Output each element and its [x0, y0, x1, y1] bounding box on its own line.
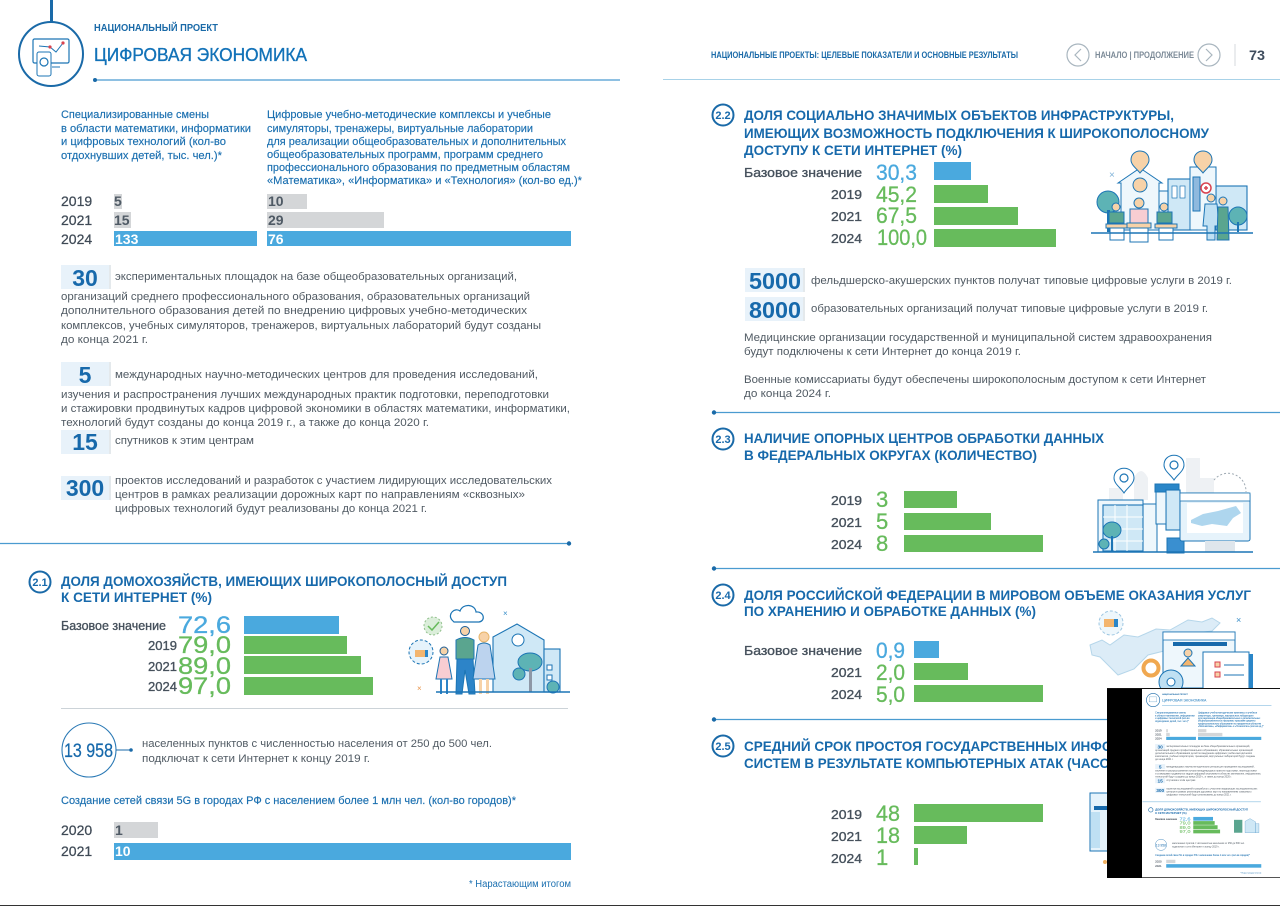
bar chart: 5G cities: 1 [115, 822, 123, 838]
bar chart: infrastructure objects: 2019 [831, 187, 862, 202]
section 2.3 heading: 2.3 [715, 434, 731, 446]
stat: 8000 educational organisations [745, 297, 1208, 323]
thumbnail page content: подключат к сети Интернет к концу 2019 г. [1172, 846, 1220, 848]
stat: 300 projects [61, 475, 553, 515]
bar chart: downtime hours: 1 [876, 845, 888, 870]
section 2.2 heading: 2.2 [715, 110, 731, 122]
stat: 30 pilot sites: до конца 2021 г. [61, 334, 148, 346]
stat: 30 pilot sites: 30 [72, 265, 98, 291]
section 2.1 heading [30, 572, 507, 605]
bar chart: infrastructure objects: 2021 [831, 209, 862, 224]
page number: 73 [1249, 47, 1265, 63]
thumbnail page content: 2021 [1155, 733, 1162, 737]
thumbnail page content: 97,0 [1180, 829, 1191, 835]
stat: 5000 feldsher points: фельдшерско-акушерских пунктов получат типовые цифровые услуги в 2019 г. [811, 275, 1232, 287]
thumbnail page content: 13 958 [1156, 842, 1167, 847]
stat: 30 pilot sites: организаций среднего профессионального образования, образовательных организаций [61, 291, 530, 303]
bar chart: households: 2024 [148, 679, 177, 694]
thumbnail page content: Базовое значение [1155, 817, 1178, 821]
bar chart: households: 72,6 [178, 612, 231, 639]
thumbnail page content: 2024 [1155, 737, 1162, 741]
thumbnail page content: комплексов, учебных симуляторов, тренажеров, виртуальных лабораторий будут созданы [1155, 755, 1255, 758]
bar chart: households: 2021 [148, 659, 177, 674]
bar chart: downtime hours: 48 [876, 801, 900, 826]
bar chart: camps: 2024 [61, 231, 92, 247]
stat: 5000 feldsher points: 5000 [749, 268, 801, 294]
section 2.3 heading: В ФЕДЕРАЛЬНЫХ ОКРУГАХ (КОЛИЧЕСТВО) [744, 447, 1037, 463]
page header: left [19, 0, 620, 86]
bar chart: data centres: 3 [876, 487, 888, 512]
bar chart: downtime hours: 18 [876, 823, 900, 848]
bar chart: data services share: 0,9 [876, 638, 905, 663]
text block: learning complexes heading: для реализации общеобразовательных и дополнительных [267, 136, 566, 148]
thumbnail page content: для реализации общеобразовательных и дополнительных [1198, 718, 1261, 720]
stat: 13 958 settlements: подключат к сети Интернет к концу 2019 г. [142, 753, 370, 765]
section 2.5 heading: 2.5 [715, 741, 731, 753]
thumbnail page content: центров в рамках реализации дорожных карт по направлениям «сквозных» [1166, 791, 1252, 793]
text block: camps heading: в области математики, информатики [61, 123, 251, 135]
thumbnail page content: 15 [1158, 778, 1163, 784]
bar chart: infrastructure objects: 2024 [831, 231, 862, 246]
page header: right [663, 44, 1280, 80]
bar chart: households [61, 612, 373, 700]
stat: 5 international centres: технологий будут созданы до конца 2019 г., а также до конца 2020 г. [61, 417, 429, 429]
illustration: family and home [409, 605, 570, 694]
thumbnail page content: профессионального образования по предметным областям [1198, 722, 1261, 725]
illustration: map of Russia with documents and gears: × [1236, 615, 1241, 625]
bar chart: households: 79,0 [178, 632, 231, 659]
thumbnail page content: и цифровых технологий (кол-во [1155, 717, 1190, 720]
stat: 5000 feldsher points [745, 268, 1232, 294]
section 2.2 heading: ДОЛЯ СОЦИАЛЬНО ЗНАЧИМЫХ ОБЪЕКТОВ ИНФРАСТРУКТУРЫ, [744, 107, 1174, 123]
illustration: map of Russia with documents and gears [1090, 611, 1253, 694]
bar chart: data services share: 2,0 [876, 660, 905, 685]
thumbnail page content: 79,0 [1180, 821, 1191, 827]
section 2.4 heading: ПО ХРАНЕНИЮ И ОБРАБОТКЕ ДАННЫХ (%) [744, 603, 1036, 619]
thumbnail page content: 2020 [1155, 859, 1162, 863]
thumbnail page content: симуляторы, тренажеры, виртуальные лаборатории [1198, 715, 1254, 717]
bar chart: infrastructure objects: 45,2 [876, 182, 917, 207]
bar chart: downtime hours: 2024 [831, 851, 862, 866]
stat: 30 pilot sites: экспериментальных площадок на базе общеобразовательных организаций, [115, 271, 517, 283]
bar chart: 5G cities: 10 [115, 843, 131, 859]
stat: 15 satellites [61, 429, 254, 455]
stat: 15 satellites: 15 [72, 429, 98, 455]
thumbnail page content: 89,0 [1180, 825, 1191, 831]
bar chart: learning complexes: 76 [268, 231, 284, 247]
thumbnail page content: Создание сетей связи 5G в городах РФ с населением более 1 млн чел. (кол-во городов)* [1155, 854, 1250, 857]
text block: medical organisations: Медицинские организации государственной и муниципальной систем здравоохранения [744, 332, 1212, 344]
title: ЦИФРОВАЯ ЭКОНОМИКА [94, 45, 307, 65]
thumbnail page content [1142, 693, 1271, 874]
text block: medical organisations [744, 332, 1212, 358]
section 2.4 heading [712, 584, 1251, 619]
bar chart: households: Базовое значение [61, 618, 166, 633]
bar chart: 5G cities [61, 822, 571, 860]
illustration: data centre and map screen [1093, 455, 1253, 553]
stat: 5 international centres: изучения и распространения лучших международных практик подготовки, переподготовки [61, 389, 549, 401]
text block: camps heading: отдохнувших детей, тыс. чел.)* [61, 150, 223, 162]
section 2.5 heading [712, 736, 1215, 771]
illustration: family and home: × [417, 684, 422, 693]
stat: 8000 educational organisations: 8000 [749, 297, 801, 323]
text block: learning complexes heading: «Математика», «Информатика» и «Технология» (кол-во ед.)* [267, 175, 583, 187]
thumbnail page content: проектов исследований и разработок с участием лидирующих исследовательских [1166, 787, 1258, 790]
thumbnail page content: дополнительного образования детей по внедрению цифровых учебно-методических [1155, 752, 1253, 755]
bar chart: learning complexes [267, 193, 571, 247]
bar chart: 5G cities: 2021 [61, 843, 92, 859]
section 2.3 heading [712, 428, 1105, 463]
bar chart: data services share: 2024 [831, 687, 862, 702]
text block: learning complexes heading: Цифровые учебно-методические комплексы и учебные [267, 109, 551, 121]
illustration: school and hospital with Wi-Fi pins [1091, 151, 1253, 242]
running title: НАЦИОНАЛЬНЫЕ ПРОЕКТЫ: ЦЕЛЕВЫЕ ПОКАЗАТЕЛИ И ОСНОВНЫЕ РЕЗУЛЬТАТЫ [711, 50, 1018, 60]
bar chart: households: 89,0 [178, 653, 231, 680]
section 2.1 heading: ДОЛЯ ДОМОХОЗЯЙСТВ, ИМЕЮЩИХ ШИРОКОПОЛОСНЫЙ ДОСТУП [61, 572, 507, 589]
inset: page thumbnail overlay [1107, 688, 1280, 878]
text block: learning complexes heading: профессионального образования по предметным областям [267, 162, 570, 174]
section 2.1 heading: 2.1 [32, 577, 48, 589]
stat: 300 projects: центров в рамках реализации дорожных карт по направлениям «сквозных» [115, 489, 525, 501]
bar chart: camps: 2021 [61, 212, 92, 228]
thumbnail page content: цифровых технологий будут реализованы до конца 2021 г. [1166, 793, 1232, 796]
stat: 30 pilot sites: комплексов, учебных симуляторов, тренажеров, виртуальных лабораторий будут созданы [61, 320, 541, 332]
thumbnail page content: ЦИФРОВАЯ ЭКОНОМИКА [1162, 698, 1207, 702]
thumbnail page content: 30 [1158, 744, 1163, 750]
eyebrow: НАЦИОНАЛЬНЫЙ ПРОЕКТ [94, 21, 218, 34]
bar chart: households: 2019 [148, 638, 177, 653]
thumbnail page content: и стажировки продвинутых кадров цифровой экономики в областях математики, информатики, [1155, 772, 1261, 775]
stat: 300 projects: проектов исследований и разработок с участием лидирующих исследовательских [115, 475, 553, 487]
bar chart: data services share [744, 638, 1043, 707]
stat: 300 projects: 300 [66, 475, 104, 501]
thumbnail page content: в области математики, информатики [1155, 714, 1195, 717]
stat: 5 international centres: и стажировки продвинутых кадров цифровой экономики в областях математики, информатики, [61, 403, 570, 415]
illustration: school and hospital with Wi-Fi pins: × [1109, 170, 1115, 181]
thumbnail page content: отдохнувших детей, тыс. чел.)* [1155, 720, 1189, 723]
text block: camps heading [61, 109, 251, 162]
thumbnail page content: технологий будут созданы до конца 2019 г., а также до конца 2020 г. [1155, 775, 1232, 778]
section 2.3 heading: НАЛИЧИЕ ОПОРНЫХ ЦЕНТРОВ ОБРАБОТКИ ДАННЫХ [744, 430, 1105, 446]
bar chart: learning complexes: 29 [268, 212, 284, 228]
bar chart: infrastructure objects [744, 160, 1056, 250]
section 2.5 heading: СРЕДНИЙ СРОК ПРОСТОЯ ГОСУДАРСТВЕННЫХ ИНФОРМАЦИОННЫХ [744, 737, 1215, 754]
stat: 5 international centres [61, 362, 570, 429]
text block: military commissariats: Военные комиссариаты будут обеспечены широкополосным доступом к сети Интернет [744, 374, 1206, 386]
section 2.4 heading: 2.4 [715, 590, 732, 602]
section 2.2 heading [712, 104, 1209, 158]
thumbnail page content: К СЕТИ ИНТЕРНЕТ (%) [1155, 811, 1187, 815]
bar chart: infrastructure objects: 30,3 [876, 160, 917, 185]
bar chart: camps [61, 193, 257, 247]
bar chart: data centres: 2024 [831, 537, 862, 552]
bar chart: 5G cities: 2020 [61, 822, 92, 838]
thumbnail page content: 300 [1156, 788, 1165, 794]
text block: medical organisations: будут подключены к сети Интернет до конца 2019 г. [744, 346, 1021, 358]
bar chart: camps: 5 [114, 193, 122, 209]
thumbnail page content: до конца 2021 г. [1155, 759, 1174, 761]
icon: back arrow [1067, 44, 1089, 66]
stat: 5 international centres: международных научно-методических центров для проведения исследований, [115, 369, 538, 381]
section 2.4 heading: ДОЛЯ РОССИЙСКОЙ ФЕДЕРАЦИИ В МИРОВОМ ОБЪЕМЕ ОКАЗАНИЯ УСЛУГ [744, 586, 1251, 603]
stat: 30 pilot sites: дополнительного образования детей по внедрению цифровых учебно-методических [61, 305, 528, 317]
thumbnail page content: Цифровые учебно-методические комплексы и учебные [1198, 711, 1258, 714]
illustration: monitor, partly hidden [1090, 793, 1120, 864]
thumbnail page content: 2021 [1155, 864, 1162, 868]
icon: digital economy emblem [19, 0, 83, 86]
thumbnail page content: экспериментальных площадок на базе общеобразовательных организаций, [1166, 745, 1250, 748]
thumbnail page content: 5 [1159, 764, 1162, 770]
thumbnail page content: «Математика», «Информатика» и «Технология» (кол-во ед.)* [1198, 725, 1264, 728]
stat: 13 958 settlements: населенных пунктов с численностью населения от 250 до 500 чел. [142, 738, 492, 750]
section 2.1 heading: К СЕТИ ИНТЕРНЕТ (%) [61, 589, 212, 605]
thumbnail page content: изучения и распространения лучших международных практик подготовки, переподготовки [1155, 771, 1257, 773]
thumbnail page content: Специализированные смены [1155, 712, 1186, 714]
stat: 300 projects: цифровых технологий будут реализованы до конца 2021 г. [115, 503, 427, 515]
section 2.2 heading: ДОСТУПУ К СЕТИ ИНТЕРНЕТ (%) [744, 142, 962, 158]
bar chart: camps: 133 [115, 231, 139, 247]
bar chart: camps: 2019 [61, 193, 92, 209]
bar chart: downtime hours [831, 801, 1043, 870]
bar chart: infrastructure objects: Базовое значение [744, 165, 862, 180]
navigation label: НАЧАЛО | ПРОДОЛЖЕНИЕ [1095, 50, 1194, 60]
bar chart: data centres [831, 487, 1043, 556]
stat: 30 pilot sites [61, 265, 541, 346]
bar chart: data centres: 8 [876, 531, 888, 556]
text block: learning complexes heading [267, 109, 583, 187]
text block: camps heading: Специализированные смены [61, 109, 209, 121]
stat: 15 satellites: спутников к этим центрам [115, 435, 254, 447]
thumbnail page content: 2019 [1155, 729, 1162, 733]
bar chart: data services share: Базовое значение [744, 643, 862, 658]
section 2.5 heading: СИСТЕМ В РЕЗУЛЬТАТЕ КОМПЬЮТЕРНЫХ АТАК (ЧАСОВ) [744, 755, 1124, 771]
thumbnail page content: населенных пунктов с численностью населения от 250 до 500 чел. [1172, 843, 1245, 845]
thumbnail page content: 72,6 [1180, 816, 1191, 822]
bar chart: households: 97,0 [178, 673, 231, 700]
stat: 8000 educational organisations: образовательных организаций получат типовые цифровые услуги в 2019 г. [811, 303, 1208, 315]
chart heading: 5G: Создание сетей связи 5G в городах РФ с населением более 1 млн чел. (кол-во городов)* [61, 795, 517, 807]
bar chart: infrastructure objects: 100,0 [877, 225, 927, 250]
thumbnail page content: ДОЛЯ ДОМОХОЗЯЙСТВ, ИМЕЮЩИХ ШИРОКОПОЛОСНЫЙ ДОСТУП [1155, 808, 1248, 812]
text block: military commissariats: до конца 2024 г. [744, 388, 831, 400]
thumbnail page content: спутников к этим центрам [1166, 780, 1196, 782]
stat: 13 958 settlements [62, 723, 492, 777]
thumbnail page content: НАЦИОНАЛЬНЫЙ ПРОЕКТ [1162, 693, 1189, 696]
bar chart: data services share: 2021 [831, 665, 862, 680]
icon: forward arrow [1198, 44, 1220, 66]
text block: camps heading: и цифровых технологий (кол-во [61, 136, 226, 148]
stat: 5 international centres: 5 [79, 362, 92, 388]
bar chart: data services share: 5,0 [876, 682, 905, 707]
illustration: family and home: × [503, 609, 508, 618]
text block: learning complexes heading: общеобразовательных программ, программ среднего [267, 149, 543, 161]
text block: military commissariats [744, 374, 1206, 400]
bar chart: downtime hours: 2019 [831, 807, 862, 822]
footnote: * Нарастающим итогом [469, 879, 571, 890]
bar chart: data centres: 5 [876, 509, 888, 534]
bar chart: data centres: 2021 [831, 515, 862, 530]
thumbnail page content: международных научно-методических центров для проведения исследований, [1166, 765, 1255, 768]
stat: 13 958 settlements: 13 958 [64, 741, 113, 762]
bar chart: downtime hours: 2021 [831, 829, 862, 844]
thumbnail page content: * Нарастающим итогом [1240, 872, 1262, 874]
bar chart: camps: 15 [114, 212, 130, 228]
text block: learning complexes heading: симуляторы, тренажеры, виртуальные лаборатории [267, 123, 533, 135]
thumbnail page content: организаций среднего профессионального образования, образовательных организаций [1155, 749, 1254, 752]
bar chart: infrastructure objects: 67,5 [876, 203, 917, 228]
bar chart: data centres: 2019 [831, 493, 862, 508]
bar chart: learning complexes: 10 [268, 193, 284, 209]
section 2.2 heading: ИМЕЮЩИХ ВОЗМОЖНОСТЬ ПОДКЛЮЧЕНИЯ К ШИРОКОПОЛОСНОМУ [744, 125, 1209, 141]
thumbnail page content: общеобразовательных программ, программ среднего [1198, 721, 1256, 723]
